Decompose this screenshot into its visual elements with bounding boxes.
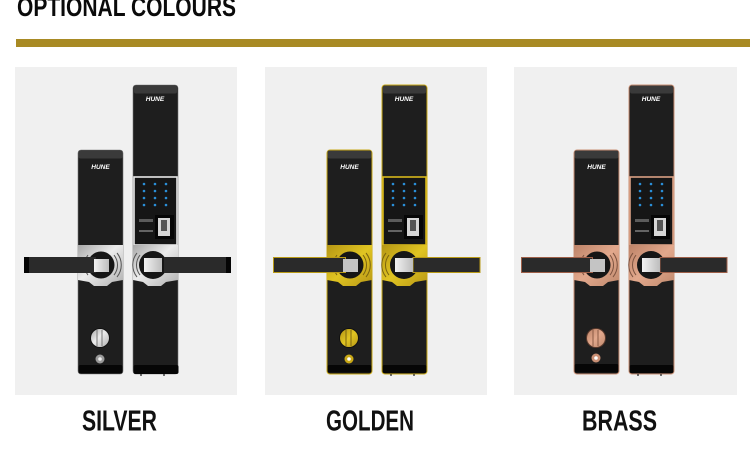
lock: silver outer: HUNE [146, 96, 165, 103]
lock: golden outer: HUNE [395, 96, 414, 103]
heading rule [16, 39, 750, 47]
lock: golden outer [382, 85, 480, 376]
lock: silver inner: HUNE [91, 164, 110, 171]
label: brass: BRASS [582, 406, 657, 438]
lock: brass inner: HUNE [587, 164, 606, 171]
lock: brass outer [629, 85, 727, 376]
panel: silver [15, 67, 237, 395]
label: silver: SILVER [82, 406, 157, 438]
lock: golden inner: HUNE [340, 164, 359, 171]
lock: golden inner [274, 150, 372, 374]
lock: silver inner [24, 150, 123, 374]
lock: silver outer [133, 85, 231, 376]
label: golden: GOLDEN [326, 406, 414, 438]
panel: brass [514, 67, 737, 395]
lock: brass inner [522, 150, 619, 374]
lock: brass outer: HUNE [642, 96, 661, 103]
panel: golden [265, 67, 487, 395]
